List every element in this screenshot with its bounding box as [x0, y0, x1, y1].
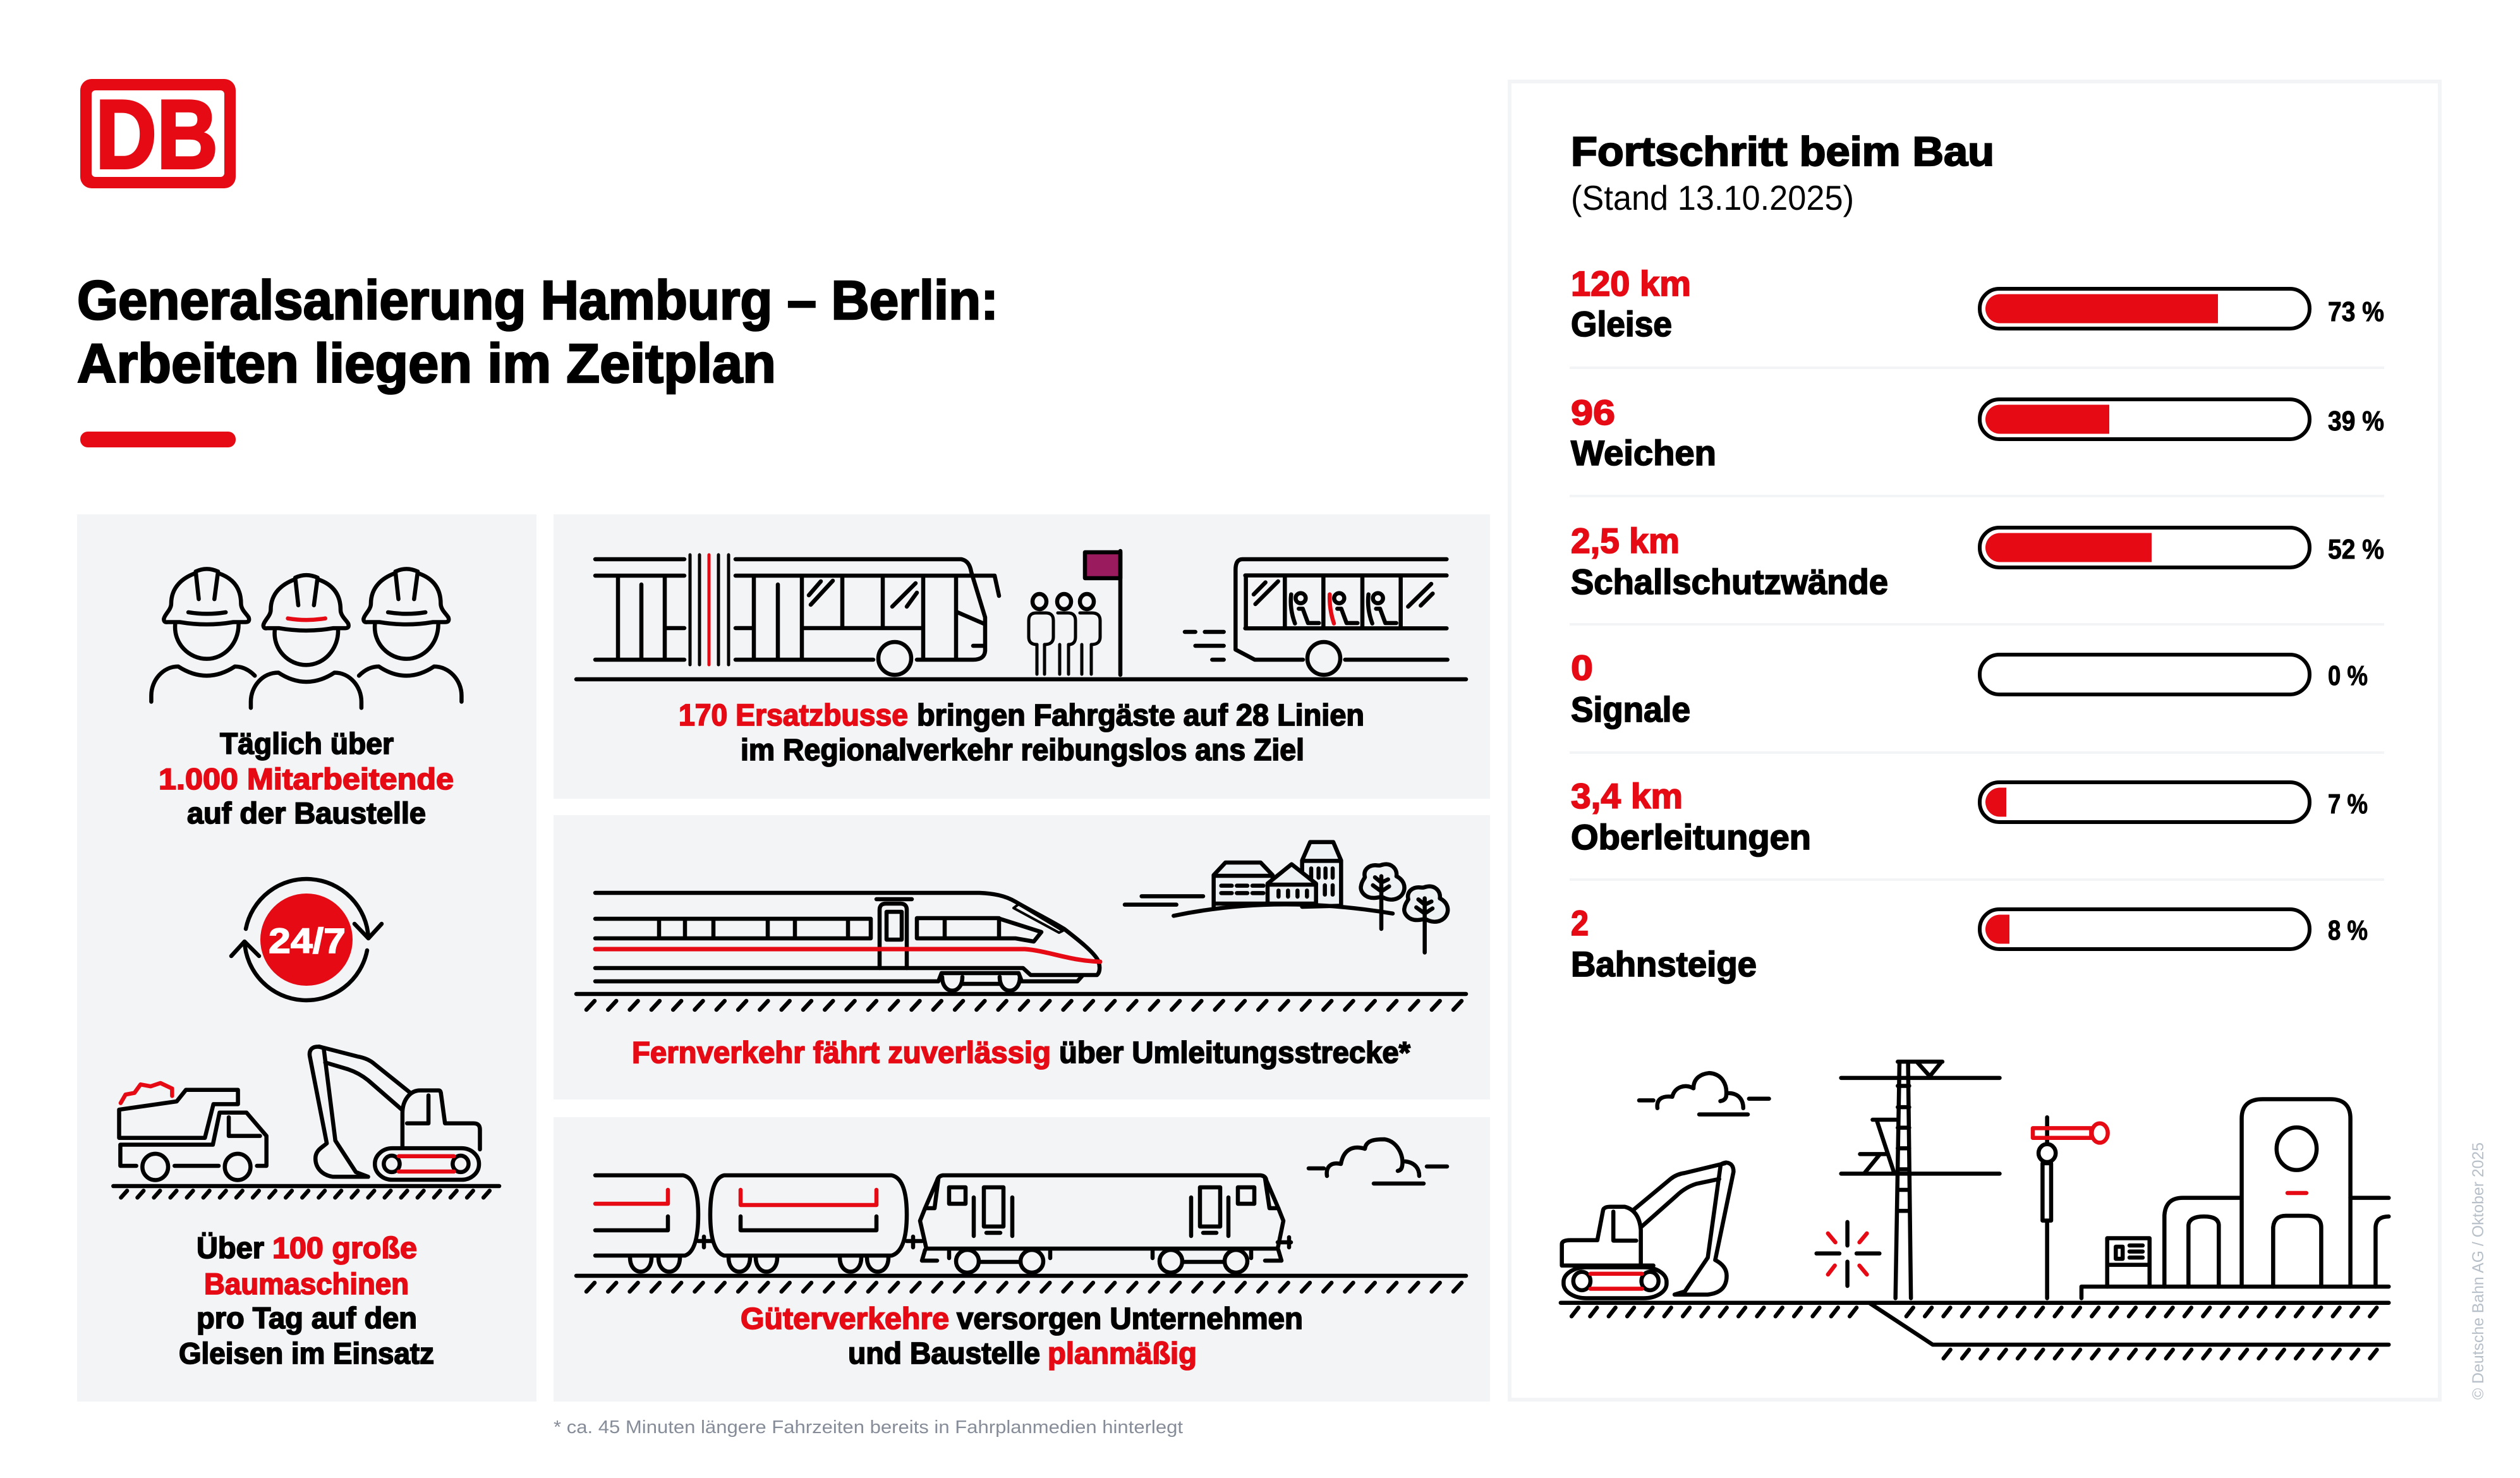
icon: dump truck and excavator — [113, 1046, 499, 1197]
footnote: * ca. 45 Minuten längere Fahrzeiten bereits in Fahrplanmedien hinterlegt — [554, 1417, 1183, 1438]
text: workers per day: Täglich über — [220, 727, 394, 760]
progress row: Signale: 0 — [1571, 648, 1593, 688]
panel: long-distance trains — [554, 815, 1490, 1099]
progress row: Gleise — [1571, 263, 2384, 344]
icon: ICE train — [595, 893, 1100, 991]
text: construction machines per day — [179, 1231, 434, 1370]
text: 170 replacement buses — [679, 699, 1364, 767]
icon: second bus with passengers — [1185, 559, 1448, 675]
text: 170 replacement buses: bringen Fahrgäste auf 28 Linien — [917, 699, 1364, 732]
progress row: Schallschutzwände: Schallschutzwände — [1571, 562, 1888, 602]
title: Generalsanierung Hamburg – Berlin: — [77, 270, 998, 331]
icon: overhead line mast — [1841, 1062, 1999, 1298]
icon: excavator — [1562, 1163, 1733, 1298]
heading — [1571, 128, 1994, 217]
progress row: Oberleitungen — [1571, 776, 2368, 857]
progress row: Schallschutzwände: 2,5 km — [1571, 521, 1680, 560]
icon: cloud — [1639, 1073, 1769, 1115]
text: long-distance traffic — [632, 1036, 1410, 1070]
text: freight traffic: versorgen Unternehmen — [957, 1302, 1303, 1336]
ground and sleepers — [576, 1276, 1466, 1292]
icon: station building and platform — [2081, 1099, 2389, 1298]
progress row: Signale: 0 % — [2328, 660, 2368, 691]
text: workers per day: 1.000 Mitarbeitende — [159, 762, 454, 796]
text: construction machines per day: Über — [197, 1231, 264, 1264]
heading: (Stand 13.10.2025) — [1571, 178, 1854, 217]
progress row: Gleise: 120 km — [1571, 263, 1691, 303]
progress row: Signale: Signale — [1571, 689, 1690, 729]
icon: spark — [1817, 1222, 1879, 1286]
heading: Fortschritt beim Bau — [1571, 128, 1994, 174]
progress row: Oberleitungen: 7 % — [2328, 789, 2368, 820]
icon: bus stop with people — [1029, 551, 1120, 675]
ground and sleepers — [576, 994, 1466, 1010]
copyright: © Deutsche Bahn AG / Oktober 2025 — [2469, 1142, 2487, 1400]
progress row: Schallschutzwände: 52 % — [2328, 534, 2384, 565]
progress row: Oberleitungen: 3,4 km — [1571, 776, 1683, 816]
icon: freight train with tank wagons — [595, 1175, 1291, 1273]
illustration: construction site — [1561, 1062, 2389, 1359]
red title accent bar — [80, 432, 236, 447]
text: construction machines per day: pro Tag auf den — [197, 1301, 417, 1335]
progress row: Weichen — [1571, 392, 2384, 473]
icon: village with trees — [1125, 842, 1448, 952]
progress row: Bahnsteige: 2 — [1571, 903, 1589, 943]
progress row: Weichen: Weichen — [1571, 433, 1716, 473]
text: construction machines per day: 100 große — [272, 1231, 417, 1264]
text: freight traffic: und Baustelle — [848, 1337, 1040, 1371]
text: freight traffic: Güterverkehre — [741, 1302, 949, 1336]
progress row: Schallschutzwände — [1571, 521, 2384, 602]
progress row: Weichen: 96 — [1571, 392, 1615, 432]
progress row: Oberleitungen: Oberleitungen — [1571, 817, 1811, 857]
text: freight traffic: planmäßig — [1048, 1337, 1197, 1371]
title — [77, 270, 998, 394]
progress row: Gleise: 73 % — [2328, 296, 2384, 327]
icon: signal — [2033, 1117, 2108, 1298]
text: long-distance traffic: über Umleitungsstrecke* — [1059, 1036, 1410, 1070]
text: construction machines per day: Baumaschinen — [204, 1267, 409, 1300]
icon: 24/7 cycle badge: 24/7 — [269, 921, 346, 960]
icon: cloud — [1309, 1139, 1447, 1184]
panel: freight trains — [554, 1117, 1490, 1402]
title: Arbeiten liegen im Zeitplan — [77, 333, 776, 394]
progress row: Gleise: Gleise — [1571, 304, 1672, 344]
panel: replacement buses — [554, 514, 1490, 799]
ground line — [576, 677, 1466, 681]
text: workers per day — [159, 727, 454, 830]
ground and slope — [1561, 1303, 2389, 1359]
panel: construction progress — [1510, 82, 2440, 1400]
progress row: Bahnsteige — [1571, 903, 2368, 984]
text: workers per day: auf der Baustelle — [187, 796, 426, 830]
text: long-distance traffic: Fernverkehr fährt zuverlässig — [632, 1036, 1051, 1070]
progress row: Signale — [1571, 648, 2368, 729]
text: 170 replacement buses: im Regionalverkehr reibungslos ans Ziel — [741, 734, 1304, 767]
progress row: Weichen: 39 % — [2328, 406, 2384, 437]
progress row: Bahnsteige: Bahnsteige — [1571, 944, 1757, 984]
icon: three workers with helmets — [151, 569, 461, 708]
panel: workers and machines — [77, 514, 536, 1402]
text: construction machines per day: Gleisen im Einsatz — [179, 1336, 434, 1370]
icon: articulated bus — [595, 555, 999, 675]
text: freight traffic — [741, 1302, 1303, 1371]
DB logo: DB — [95, 80, 218, 189]
text: 170 replacement buses: 170 Ersatzbusse — [679, 699, 908, 732]
progress row: Bahnsteige: 8 % — [2328, 915, 2368, 946]
icon: 24/7 cycle badge — [231, 879, 382, 1000]
